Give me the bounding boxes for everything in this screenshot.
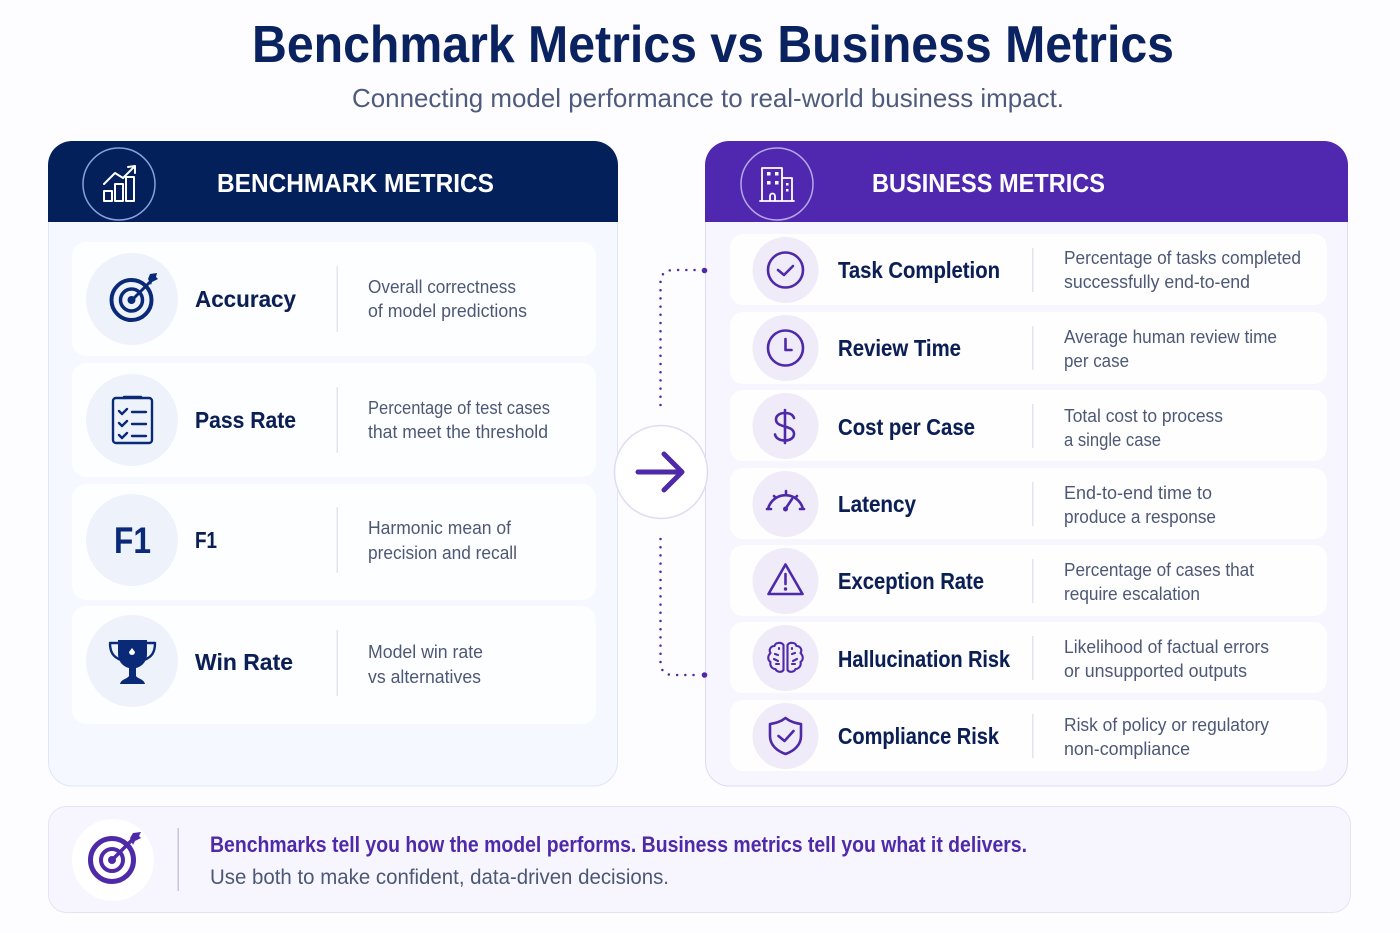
card: exception rate: Exception Rate bbox=[838, 568, 984, 594]
icon: dollar bbox=[775, 410, 794, 443]
card: compliance risk bbox=[730, 700, 1327, 771]
card: review time: Average human review time bbox=[1064, 327, 1277, 347]
card: task completion: Percentage of tasks completed bbox=[1064, 248, 1301, 268]
card: exception rate bbox=[730, 545, 1327, 616]
icon: shield check bbox=[770, 718, 801, 754]
subtitle: Connecting model performance to real-world business impact. bbox=[352, 83, 1064, 113]
card: pass rate: that meet the threshold bbox=[368, 422, 548, 442]
icon: warning triangle bbox=[768, 564, 802, 594]
card: task completion bbox=[730, 234, 1327, 305]
card: f1 bbox=[72, 484, 596, 600]
panel: business metrics bbox=[705, 141, 1348, 786]
icon: trophy bbox=[110, 640, 155, 684]
icon: office building bbox=[741, 148, 813, 220]
card: hallucination risk bbox=[730, 622, 1327, 693]
card: latency: produce a response bbox=[1064, 507, 1216, 527]
card: hallucination risk: or unsupported outputs bbox=[1064, 661, 1247, 681]
icon: brain bbox=[768, 643, 803, 672]
icon: F1: F1 bbox=[114, 520, 151, 561]
icon: gauge bbox=[767, 491, 804, 512]
panel heading: BENCHMARK METRICS bbox=[217, 168, 494, 198]
title: Benchmark Metrics vs Business Metrics bbox=[252, 16, 1174, 74]
card: latency bbox=[730, 468, 1327, 539]
icon: clock bbox=[768, 330, 803, 366]
panel header bbox=[48, 141, 618, 222]
card: f1: F1 bbox=[195, 527, 217, 553]
connector: dotted bottom bbox=[660, 539, 707, 678]
footer text: Use both to make confident, data-driven decisions. bbox=[210, 866, 669, 889]
card: cost per case: Cost per Case bbox=[838, 414, 975, 440]
card: win rate bbox=[72, 606, 596, 724]
panel body bbox=[48, 160, 618, 786]
card: pass rate bbox=[72, 363, 596, 477]
footer text bbox=[210, 832, 1027, 889]
panel heading: BUSINESS METRICS bbox=[872, 168, 1105, 198]
card: task completion: successfully end-to-end bbox=[1064, 272, 1250, 292]
connector: dotted top bbox=[660, 268, 707, 405]
footer text: Benchmarks tell you how the model performs. Business metrics tell you what it delivers. bbox=[210, 832, 1027, 857]
card: pass rate: Pass Rate bbox=[195, 407, 296, 433]
card: pass rate: Percentage of test cases bbox=[368, 398, 550, 418]
icon: footer target bbox=[90, 832, 141, 882]
card: accuracy: Overall correctness bbox=[368, 277, 516, 297]
panel: benchmark metrics bbox=[48, 141, 618, 786]
card: review time bbox=[730, 312, 1327, 384]
icon: checklist bbox=[113, 397, 152, 443]
icon: growth chart bbox=[83, 148, 155, 220]
card: review time: per case bbox=[1064, 351, 1129, 371]
card: cost per case bbox=[730, 390, 1327, 461]
card: latency: End-to-end time to bbox=[1064, 483, 1212, 503]
footer callout bbox=[48, 806, 1350, 912]
card: cost per case: Total cost to process bbox=[1064, 406, 1223, 426]
card: f1: precision and recall bbox=[368, 543, 517, 563]
card: win rate: Model win rate bbox=[368, 642, 483, 662]
card: hallucination risk: Likelihood of factual errors bbox=[1064, 637, 1269, 657]
arrow button bbox=[614, 426, 708, 518]
card: compliance risk: Risk of policy or regulatory bbox=[1064, 715, 1269, 735]
card: win rate: vs alternatives bbox=[368, 667, 481, 687]
card: latency: Latency bbox=[838, 491, 916, 517]
panel body bbox=[706, 160, 1348, 786]
card: exception rate: Percentage of cases that bbox=[1064, 560, 1254, 580]
card: review time: Review Time bbox=[838, 335, 961, 361]
card: accuracy: of model predictions bbox=[368, 301, 527, 321]
icon: target bbox=[112, 273, 158, 320]
icon: check circle bbox=[768, 252, 803, 288]
card: win rate: Win Rate bbox=[195, 649, 293, 675]
card: compliance risk: Compliance Risk bbox=[838, 723, 999, 749]
card: hallucination risk: Hallucination Risk bbox=[838, 646, 1010, 672]
card: task completion: Task Completion bbox=[838, 257, 1000, 283]
card: f1: Harmonic mean of bbox=[368, 518, 512, 538]
panel header bbox=[705, 141, 1348, 222]
card: accuracy bbox=[72, 242, 596, 356]
card: compliance risk: non-compliance bbox=[1064, 739, 1190, 759]
card: accuracy: Accuracy bbox=[195, 286, 296, 312]
card: cost per case: a single case bbox=[1064, 430, 1161, 450]
card: exception rate: require escalation bbox=[1064, 584, 1200, 604]
